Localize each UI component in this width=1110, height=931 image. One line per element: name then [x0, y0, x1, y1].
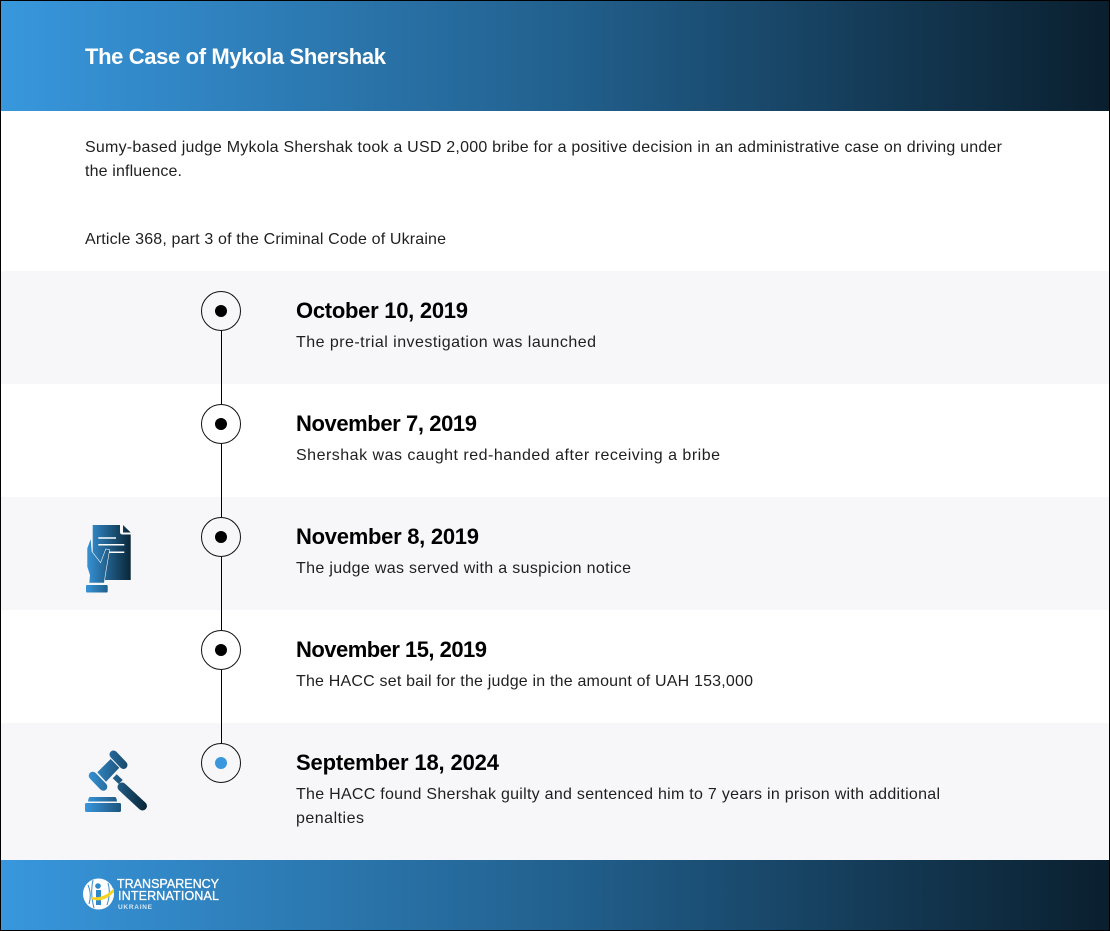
event: November 7, 2019: Shershak was caught red-handed after receiving a bribe [296, 447, 720, 464]
logo: Transparency International Ukraine: INTERNATIONAL [118, 889, 219, 903]
event: November 8, 2019: The judge was served with a suspicion notice [296, 560, 631, 577]
event: November 7, 2019: November 7, 2019 [296, 411, 477, 436]
event: October 10, 2019: October 10, 2019 [296, 298, 468, 323]
timeline panel [1, 271, 1109, 860]
event: October 10, 2019 [202, 292, 596, 351]
logo: Transparency International Ukraine: TRANSPARENCY [117, 877, 220, 891]
event: November 15, 2019 [202, 630, 753, 690]
logo: Transparency International Ukraine: UKRAINE [118, 904, 153, 911]
event: September 18, 2024: The HACC found Shershak guilty and sentenced him to 7 years in prison with additional [296, 786, 940, 803]
event: November 7, 2019 [202, 404, 720, 464]
event: November 8, 2019: November 8, 2019 [296, 524, 479, 549]
legal article reference: Article 368, part 3 of the Criminal Code of Ukraine [85, 231, 446, 248]
header banner [1, 1, 1109, 111]
icon: hand holding document [86, 525, 131, 592]
case summary text: Sumy-based judge Mykola Shershak took a USD 2,000 bribe for a positive decision in an administrative case on driving under [85, 139, 1003, 156]
event: September 18, 2024: penalties [296, 810, 364, 827]
event: November 8, 2019 [202, 518, 631, 577]
event: November 15, 2019: The HACC set bail for the judge in the amount of UAH 153,000 [296, 673, 753, 690]
logo: Transparency International Ukraine [83, 877, 220, 911]
case summary text [85, 139, 1003, 180]
footer banner [1, 860, 1109, 930]
case summary text: the influence. [85, 163, 182, 180]
icon: judge gavel [85, 754, 142, 812]
event: September 18, 2024 [202, 744, 940, 827]
event: November 15, 2019: November 15, 2019 [296, 637, 487, 662]
event: October 10, 2019: The pre-trial investigation was launched [296, 334, 596, 351]
title: The Case of Mykola Shershak [85, 44, 387, 69]
event: September 18, 2024: September 18, 2024 [296, 750, 500, 775]
